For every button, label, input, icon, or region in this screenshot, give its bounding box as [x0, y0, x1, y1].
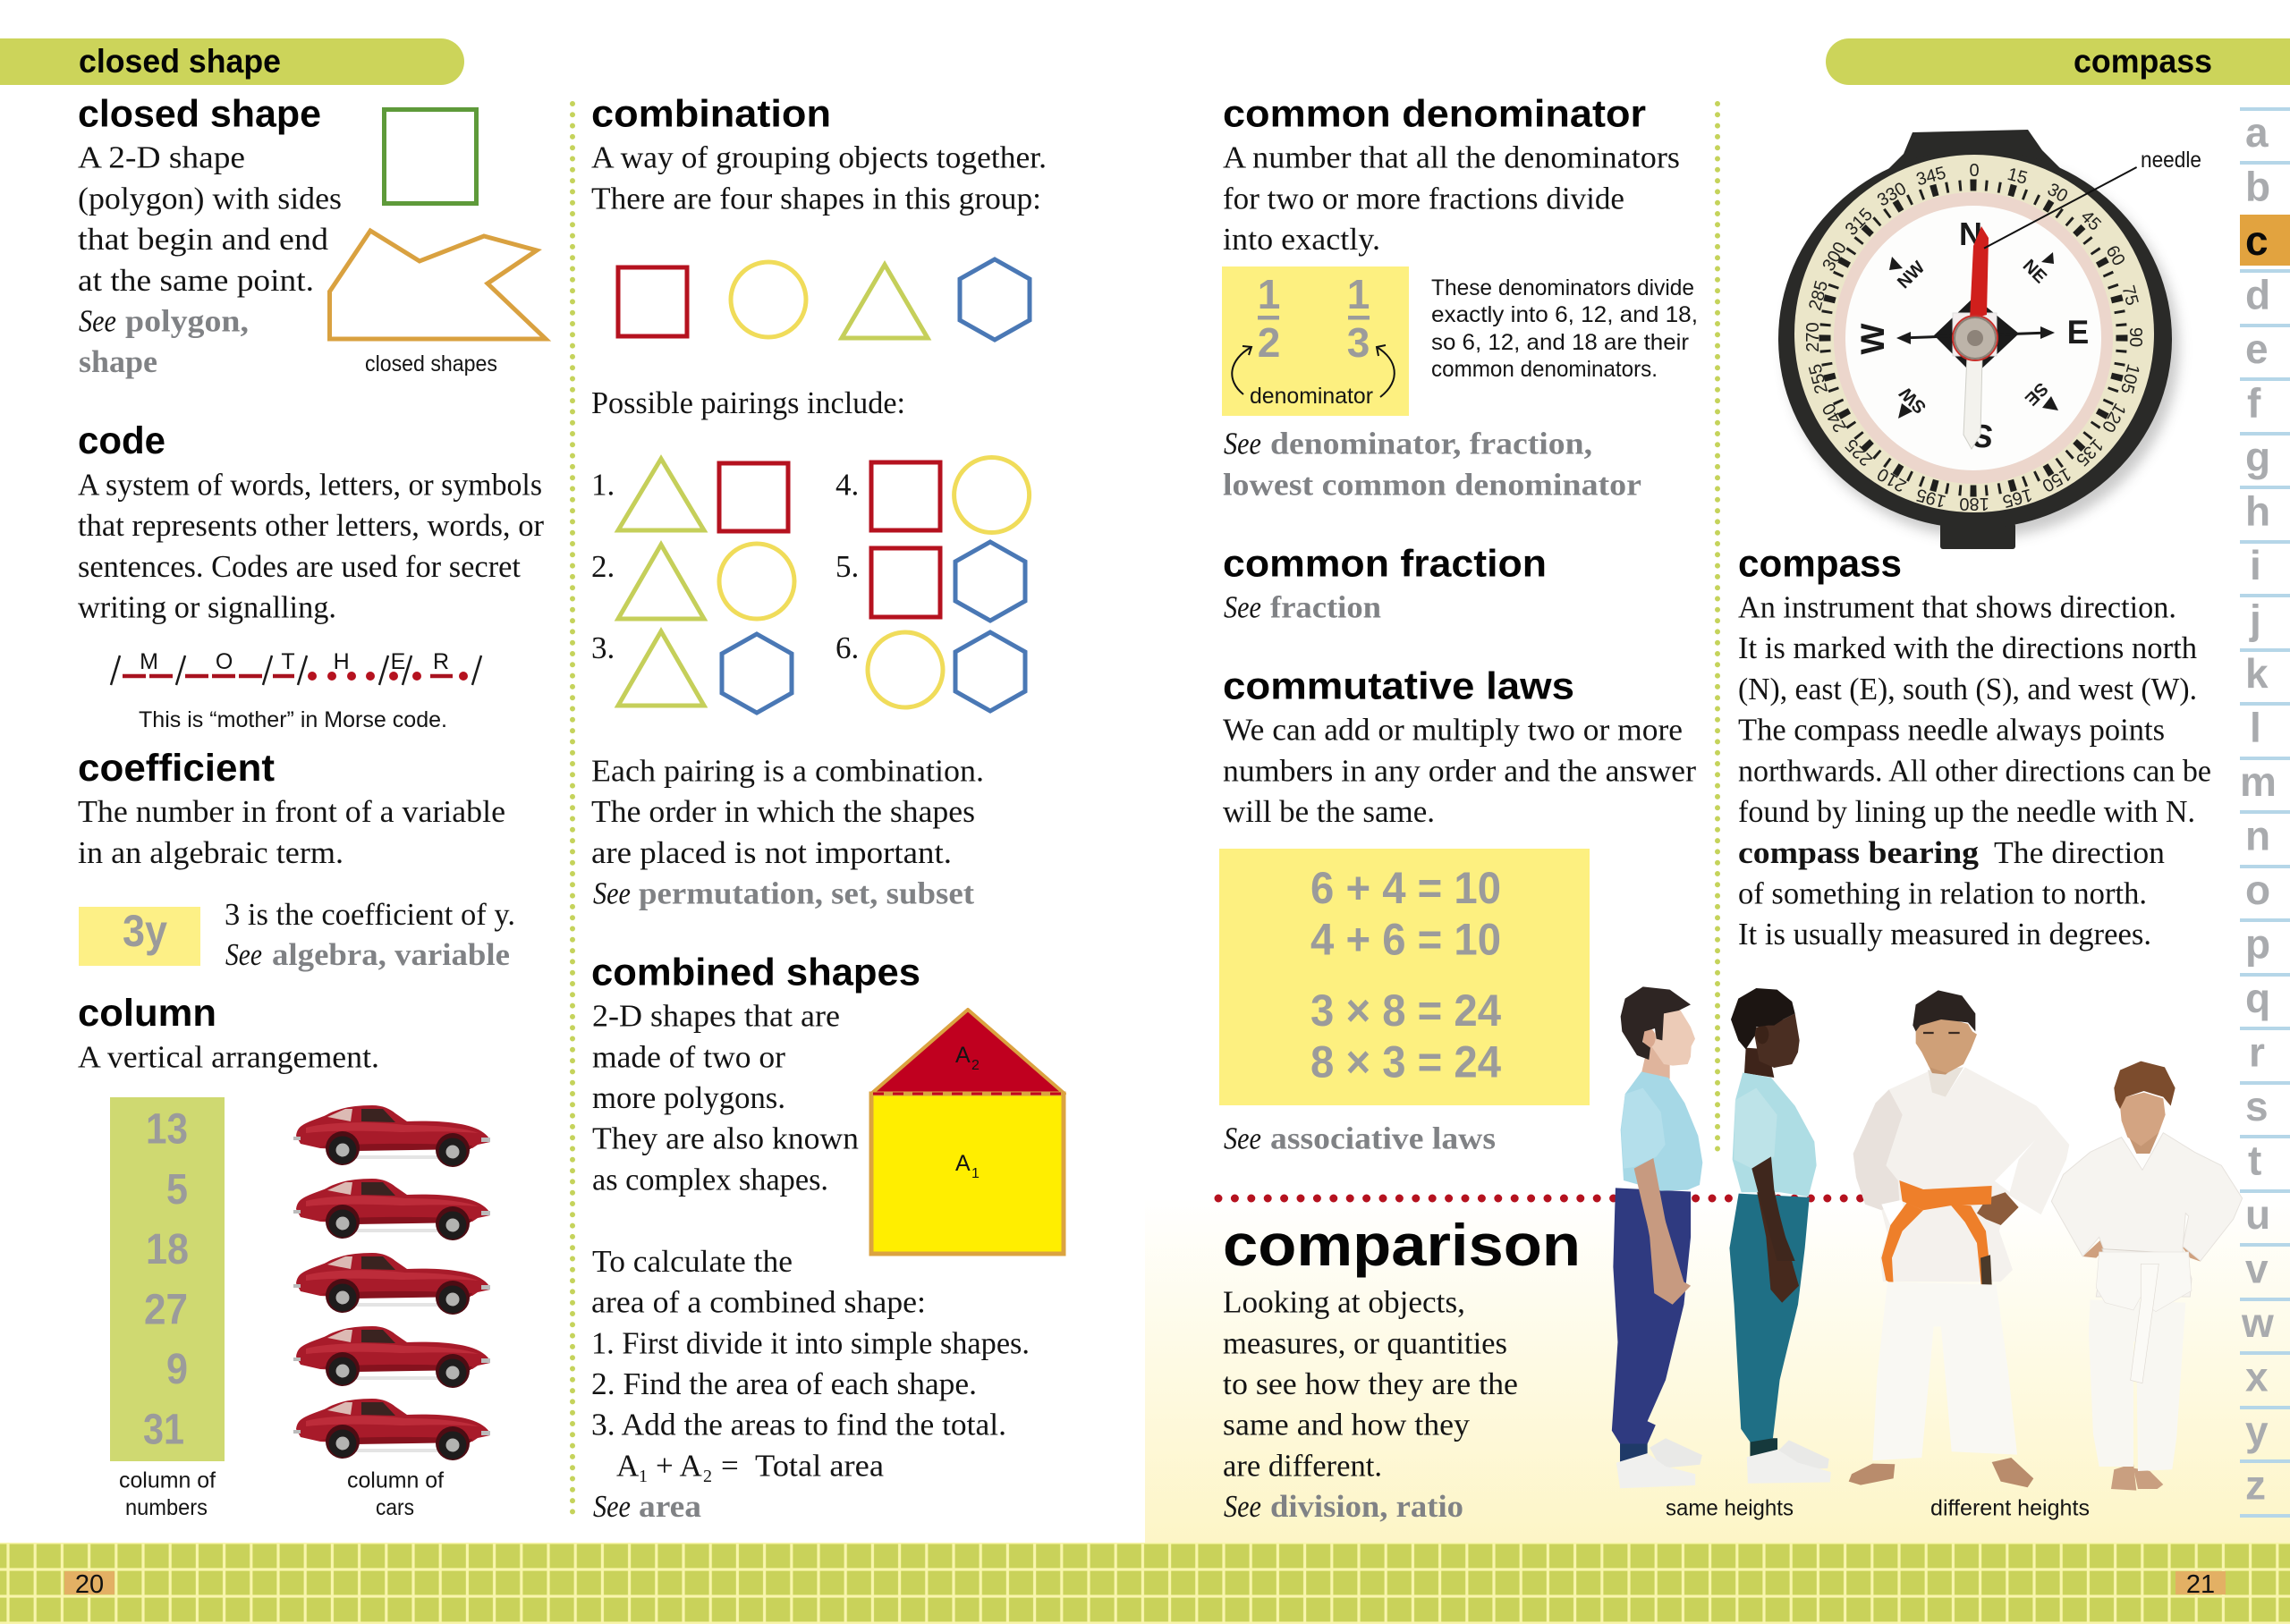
degree numbers: 270 — [1803, 322, 1823, 352]
explanation text: are placed is not important. — [591, 835, 952, 870]
centre diamond and arrows — [1896, 297, 2055, 376]
index letters: l — [2250, 705, 2261, 751]
caption: column of numbers — [119, 1468, 216, 1520]
definition text: A vertical arrangement. — [78, 1039, 379, 1074]
caption: column of cars — [347, 1468, 444, 1520]
entry: compass — [1738, 542, 2211, 952]
fraction note — [1431, 275, 1698, 382]
index letters: h — [2245, 488, 2270, 535]
definition text: found by lining up the needle with N. — [1738, 794, 2195, 829]
pairings diagram: 6. — [835, 630, 859, 665]
degree numbers: 315 — [1842, 205, 1877, 240]
index letters: j — [2249, 596, 2261, 642]
equations panel: 6 + 4 = 10 — [1310, 863, 1501, 913]
explanation text — [591, 753, 984, 910]
entry: combination — [591, 93, 1047, 910]
definition text — [1738, 590, 2211, 952]
steps text: A — [616, 1448, 640, 1483]
definition text: numbers in any order and the answer — [1223, 753, 1696, 788]
fraction panel — [1222, 266, 1409, 416]
caption: same heights: same heights — [1666, 1495, 1794, 1520]
degree numbers: 90 — [2125, 327, 2145, 347]
entry: common denominator — [1222, 93, 1698, 502]
example note — [225, 897, 515, 972]
compass points: SE — [2021, 378, 2052, 410]
entry: column — [78, 992, 490, 1520]
index letters: p — [2245, 921, 2270, 968]
boys side view: lower bodies — [1612, 1154, 1831, 1488]
intro text: A way of grouping objects together. — [591, 140, 1047, 175]
definition text — [592, 999, 859, 1197]
definition text: into exactly. — [1223, 222, 1380, 257]
four shapes — [618, 259, 1030, 340]
compass points — [1854, 216, 2089, 454]
example box 3y — [79, 906, 200, 966]
definition text: for two or more fractions divide — [1223, 181, 1624, 216]
example note: See — [225, 937, 262, 972]
degree numbers: 225 — [1842, 435, 1877, 469]
compass points: E — [2067, 314, 2089, 351]
morse code diagram: O — [216, 649, 233, 674]
cross references: See — [1224, 427, 1261, 461]
house shape diagram: A — [955, 1151, 971, 1176]
heading: combination — [591, 93, 831, 136]
steps text — [591, 1244, 1030, 1524]
heading: comparison — [1223, 1212, 1581, 1278]
heading: common denominator — [1223, 93, 1646, 136]
degree numbers: 0 — [1969, 161, 1980, 181]
fraction panel: denominator — [1250, 384, 1373, 409]
caption: column of numbers: numbers — [125, 1495, 208, 1520]
entry: coefficient — [78, 747, 515, 972]
pairings diagram: 3. — [591, 630, 615, 665]
steps text: + A — [656, 1448, 703, 1483]
index letters: c — [2245, 217, 2269, 264]
column of numbers: 5 — [166, 1166, 188, 1214]
morse code diagram: H — [334, 649, 350, 674]
caption: column of numbers: column of — [119, 1468, 216, 1493]
definition text: We can add or multiply two or more — [1223, 713, 1683, 748]
pairings diagram: 5. — [835, 549, 859, 584]
heading: compass — [1738, 542, 1902, 585]
degree numbers — [1803, 161, 2145, 513]
degree numbers: 30 — [2044, 180, 2071, 207]
index letters: v — [2245, 1245, 2269, 1291]
definition text: more polygons. — [592, 1080, 785, 1115]
fraction panel: 2 — [1258, 319, 1280, 366]
steps text: 2. Find the area of each shape. — [591, 1366, 977, 1401]
header tab right — [1826, 38, 2290, 85]
caption: column of cars: cars — [376, 1495, 414, 1520]
heading: code — [78, 419, 165, 462]
morse code diagram: T — [281, 649, 295, 674]
definition text: 2-D shapes that are — [592, 999, 840, 1034]
definition text: A system of words, letters, or symbols — [78, 467, 542, 502]
morse code diagram: E — [391, 649, 405, 674]
heading: coefficient — [78, 747, 275, 790]
header tab left: closed shape — [79, 43, 281, 80]
morse code diagram — [111, 649, 481, 685]
explanation text: The order in which the shapes — [591, 794, 975, 829]
compass points: N — [1959, 216, 1982, 252]
definition text: will be the same. — [1223, 794, 1435, 829]
example note: 3 is the coefficient of y. — [225, 897, 515, 932]
degree numbers: 105 — [2116, 362, 2143, 396]
morse code diagram: M — [140, 649, 158, 674]
definition text: polygon, — [125, 304, 249, 338]
index letters: f — [2247, 379, 2261, 426]
entry: combined shapes — [591, 952, 1064, 1524]
compass points: NE — [2019, 256, 2050, 287]
heading: common fraction — [1223, 542, 1547, 585]
boy 4: head and white gi top — [2051, 1062, 2243, 1297]
degree numbers: 60 — [2102, 242, 2129, 269]
definition text: shape — [79, 344, 157, 379]
index letters: o — [2245, 867, 2270, 913]
cross references: lowest common denominator — [1223, 467, 1641, 502]
index letters: a — [2245, 109, 2269, 156]
casing — [1778, 130, 2172, 549]
entry: commutative laws — [1219, 665, 1696, 1156]
pairings diagram — [591, 458, 1030, 713]
definition text: A 2-D shape — [78, 140, 245, 175]
index letters: e — [2245, 326, 2269, 372]
compass points: W — [1854, 323, 1891, 354]
icon: orange polygon — [329, 231, 546, 339]
definition text: that begin and end — [78, 222, 329, 257]
house shape diagram — [871, 1010, 1064, 1254]
definition text: (polygon) with sides — [78, 181, 342, 216]
fraction note: so 6, 12, and 18 are their — [1431, 330, 1689, 355]
definition text — [1223, 140, 1680, 257]
caption: closed shapes — [365, 351, 497, 376]
index letters: b — [2245, 163, 2270, 209]
definition text: An instrument that shows direction. — [1738, 590, 2176, 624]
definition text: The direction — [1994, 835, 2165, 870]
degree numbers: 210 — [1874, 463, 1910, 495]
pairings label: Possible pairings include: — [591, 385, 905, 420]
degree numbers: 240 — [1819, 400, 1851, 436]
intro text: There are four shapes in this group: — [591, 181, 1041, 216]
column of numbers: 27 — [144, 1286, 188, 1334]
index letters: s — [2245, 1083, 2269, 1129]
column of numbers: 13 — [146, 1106, 188, 1154]
steps text: See — [593, 1489, 631, 1524]
degree numbers: 300 — [1819, 239, 1851, 275]
fraction panel: 1 — [1347, 271, 1370, 317]
cross references — [1223, 427, 1641, 502]
definition text: The compass needle always points — [1738, 713, 2165, 748]
boy 1: head and blue shirt — [1621, 986, 1702, 1261]
boy 3: head, white gi top and orange belt — [1853, 990, 2069, 1288]
definition text: in an algebraic term. — [78, 835, 344, 870]
definition text: as complex shapes. — [592, 1163, 828, 1197]
definition text: See — [1224, 1489, 1261, 1524]
definition text: (N), east (E), south (S), and west (W). — [1738, 672, 2197, 706]
cross reference — [1224, 590, 1381, 624]
entry: closed shape — [78, 93, 546, 379]
entry: code — [78, 419, 544, 732]
needle callout — [1984, 148, 2201, 249]
illustration: children compared by height — [1612, 986, 2243, 1491]
header tab right: compass — [2074, 43, 2212, 80]
degree numbers: 285 — [1805, 278, 1832, 312]
definition text: Looking at objects, — [1223, 1285, 1465, 1320]
degree numbers: 195 — [1914, 485, 1948, 512]
intro text — [591, 140, 1047, 216]
heading: commutative laws — [1223, 665, 1574, 708]
compass points: S — [1972, 418, 1993, 454]
steps text: 2 — [703, 1467, 712, 1486]
equations panel: 8 × 3 = 24 — [1310, 1037, 1501, 1087]
boy 2: head and pale shirt — [1731, 988, 1817, 1261]
definition text — [78, 794, 505, 870]
definition text — [78, 140, 342, 379]
pairings diagram: 4. — [835, 467, 859, 502]
explanation text: See — [593, 876, 631, 910]
index letters: w — [2241, 1299, 2274, 1346]
index letters: t — [2248, 1138, 2261, 1184]
index letters: q — [2245, 975, 2270, 1021]
definition text: measures, or quantities — [1223, 1325, 1507, 1360]
column of numbers: 9 — [166, 1346, 188, 1393]
heading: column — [78, 992, 216, 1035]
needle callout: needle — [2141, 148, 2201, 173]
definition text: They are also known — [592, 1121, 859, 1156]
alphabet index sidebar — [2240, 109, 2290, 1516]
definition text: northwards. All other directions can be — [1738, 753, 2211, 788]
degree numbers: 15 — [2006, 165, 2030, 189]
degree numbers: 120 — [2098, 400, 2130, 436]
steps text: Total area — [755, 1448, 884, 1483]
background: comparison panel tint — [1145, 1198, 2290, 1544]
fraction note: These denominators divide — [1431, 275, 1694, 300]
index letters: g — [2245, 434, 2270, 480]
icon: green square — [385, 109, 476, 204]
definition text — [78, 467, 544, 624]
degree numbers: 150 — [2039, 463, 2074, 495]
soft shadow — [1785, 159, 2179, 538]
house shape diagram: 1 — [971, 1166, 980, 1181]
fraction panel: 3 — [1347, 319, 1370, 366]
definition text: The number in front of a variable — [78, 794, 505, 829]
explanation text: permutation, set, subset — [639, 876, 974, 910]
caption: different heights: different heights — [1930, 1495, 2090, 1520]
steps text: 1 — [639, 1467, 648, 1486]
index letters: d — [2245, 272, 2270, 318]
definition text: It is marked with the directions north — [1738, 630, 2197, 665]
entry: common fraction — [1223, 542, 1547, 624]
cross reference: fraction — [1270, 590, 1381, 624]
active letter highlight — [2240, 215, 2290, 266]
compass points: NW — [1894, 258, 1929, 292]
fraction note: exactly into 6, 12, and 18, — [1431, 302, 1698, 327]
index letters — [2240, 109, 2277, 1508]
definition text: sentences. Codes are used for secret — [78, 549, 521, 584]
definition text: of something in relation to north. — [1738, 876, 2147, 910]
degree numbers: 135 — [2072, 435, 2107, 469]
column of cars — [293, 1105, 490, 1460]
definition text: that represents other letters, words, or — [78, 508, 544, 543]
needle: red and white — [1953, 226, 1997, 449]
equations panel: 3 × 8 = 24 — [1310, 985, 1501, 1036]
index letters: m — [2240, 758, 2277, 805]
equations panel: 4 + 6 = 10 — [1310, 914, 1501, 964]
steps text: area — [639, 1489, 701, 1524]
fraction note: common denominators. — [1431, 357, 1658, 382]
definition text: writing or signalling. — [78, 590, 336, 624]
page number 20 — [64, 1570, 114, 1599]
caption: This is “mother” in Morse code. — [139, 707, 447, 732]
boy 4: trousers and feet — [2089, 1252, 2192, 1491]
page number 21: 21 — [2186, 1570, 2215, 1599]
page number 21 — [2176, 1570, 2226, 1599]
index letters: n — [2245, 812, 2270, 859]
caption: column of cars: column of — [347, 1468, 444, 1493]
steps text: area of a combined shape: — [591, 1285, 926, 1320]
definition text: same and how they — [1223, 1408, 1471, 1442]
column of numbers: 18 — [146, 1226, 189, 1273]
definition text — [1223, 713, 1696, 829]
equations panel — [1219, 849, 1590, 1105]
entry: comparison — [1223, 986, 2243, 1524]
index letters: x — [2245, 1354, 2269, 1400]
definition text: It is usually measured in degrees. — [1738, 917, 2151, 952]
index letters: y — [2245, 1408, 2269, 1454]
fraction panel: 1 — [1258, 271, 1280, 317]
steps text: = — [721, 1448, 739, 1483]
example note: algebra, variable — [272, 937, 510, 972]
degree numbers: 180 — [1959, 494, 1989, 513]
definition text: compass bearing — [1738, 835, 1980, 870]
page number 20: 20 — [75, 1570, 104, 1599]
degree ring — [1794, 155, 2154, 512]
compass photo illustration — [1778, 130, 2179, 549]
index letters: z — [2245, 1461, 2266, 1508]
header tab left — [0, 38, 464, 85]
column of numbers — [110, 1097, 225, 1461]
definition text: A number that all the denominators — [1223, 140, 1680, 175]
explanation text: Each pairing is a combination. — [591, 753, 984, 788]
boy 3: trousers and feet — [1849, 1281, 2033, 1487]
definition text: are different. — [1223, 1448, 1382, 1483]
heading: combined shapes — [591, 952, 920, 994]
definition text: at the same point. — [78, 263, 314, 298]
index letters: u — [2245, 1191, 2270, 1238]
footer grid band — [0, 1543, 2290, 1624]
definition text: made of two or — [592, 1039, 785, 1074]
example box 3y: 3y — [123, 906, 167, 956]
steps text: 3. Add the areas to find the total. — [591, 1408, 1006, 1442]
cross reference: associative laws — [1270, 1121, 1496, 1156]
morse code diagram: R — [433, 649, 449, 674]
pairings diagram: 2. — [591, 549, 615, 584]
degree numbers: 165 — [2000, 485, 2034, 512]
definition text: See — [79, 304, 116, 338]
index letters: k — [2245, 650, 2269, 697]
steps text: 1. First divide it into simple shapes. — [591, 1325, 1030, 1360]
column of numbers: 31 — [143, 1406, 184, 1454]
house shape diagram: 2 — [971, 1058, 980, 1073]
definition text — [1223, 1285, 1518, 1524]
compass points: SW — [1896, 383, 1930, 417]
cross references: denominator, fraction, — [1270, 427, 1592, 461]
definition text: to see how they are the — [1223, 1366, 1518, 1401]
pairings diagram: 1. — [591, 467, 615, 502]
index letters: r — [2249, 1028, 2265, 1075]
degree numbers: 255 — [1805, 362, 1832, 396]
degree numbers: 45 — [2076, 207, 2105, 235]
definition text: division, ratio — [1270, 1489, 1463, 1524]
cross reference: See — [1224, 1121, 1261, 1156]
degree numbers: 330 — [1874, 179, 1910, 211]
cross reference: See — [1224, 590, 1261, 624]
house shape diagram: A — [955, 1043, 971, 1068]
heading: closed shape — [78, 93, 321, 136]
degree numbers: 345 — [1914, 163, 1948, 190]
steps text: To calculate the — [592, 1244, 793, 1279]
index letters: i — [2250, 542, 2261, 588]
degree numbers: 75 — [2117, 283, 2142, 308]
